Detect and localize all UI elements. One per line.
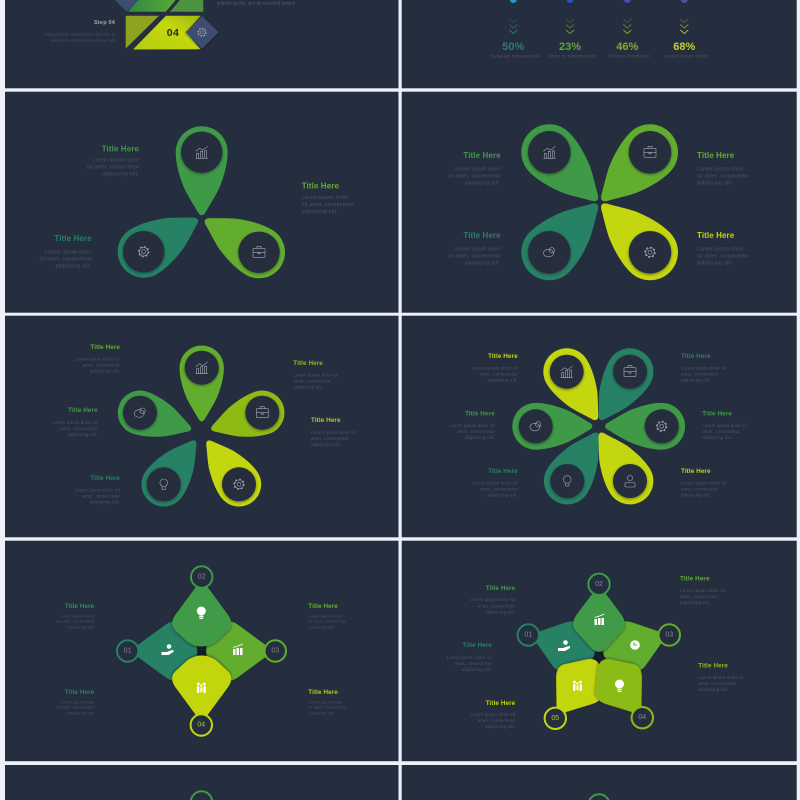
text block: middle right: adipiscing elit.	[702, 435, 733, 440]
segment 04: 04	[197, 722, 205, 728]
panel: six petals	[402, 316, 797, 537]
text block: top left: adipiscing elit.	[103, 172, 139, 178]
percentage column 2: 23%	[559, 41, 581, 53]
text block: top left: Lorem ipsum dolor	[92, 158, 139, 164]
text block: bottom right: adipiscing elit.	[697, 261, 733, 267]
text block: top right: adipiscing elit.	[293, 384, 324, 390]
petal: chart	[180, 346, 224, 421]
text block: top left: Lorem ipsum dolor	[60, 614, 95, 618]
text block: top left: adipiscing elit.	[68, 625, 94, 629]
text block: middle left: Title Here	[68, 407, 98, 414]
text block: top left: adipiscing elit.	[485, 610, 515, 614]
text block: top right: Title Here	[680, 576, 710, 582]
text block: top right	[681, 353, 727, 382]
text block: lower right	[311, 417, 357, 447]
text block: lower right: amet, consectetur	[311, 436, 349, 441]
percentage column 4: 68%	[673, 41, 696, 53]
percentage column 2: Dolor in reprehender	[548, 54, 596, 60]
percentage column 4: Lorem ipsum dolor	[664, 54, 708, 60]
text block: middle left	[447, 642, 493, 672]
text block: bottom right	[308, 689, 347, 715]
text block: top left: Lorem ipsum dolor sit	[75, 356, 121, 362]
panel: five-part star	[402, 541, 797, 761]
text block: right: adipiscing elit.	[302, 209, 338, 215]
text block: bottom left: adipiscing elit.	[464, 261, 501, 267]
text block: middle left: Title Here	[462, 642, 492, 649]
step 03 caption remainder: adipiscing elit, sed do eiusmod tempor	[217, 0, 296, 6]
panel: process steps (cropped top left)	[5, 0, 398, 88]
petal: gear	[582, 185, 690, 292]
text block: middle left: amet, consectetur	[60, 426, 98, 431]
text block: bottom right	[697, 231, 749, 267]
text block: lower right: Title Here	[311, 417, 341, 424]
diamond centre	[197, 646, 207, 656]
text block: top left	[87, 144, 139, 178]
percentage column 1: Eulapias scholasteria	[490, 54, 540, 60]
text block: middle left: amet, consectetur	[457, 429, 495, 434]
text block: bottom left: Lorem ipsum dolor sit	[470, 712, 516, 717]
petal: briefcase	[204, 385, 290, 450]
text block: bottom left: Lorem ipsum dolor	[454, 247, 501, 253]
petal: piggy bank	[512, 403, 592, 450]
petal: gear	[605, 403, 685, 450]
text block: top left: sit amet, consectetur	[448, 174, 501, 180]
text block: right: Lorem ipsum dolor sit	[698, 675, 744, 680]
text block: top right: sit amet, consectetur	[308, 620, 347, 624]
segment 02	[172, 566, 231, 646]
text block: bottom right: Title Here	[681, 468, 711, 475]
petal: briefcase	[582, 113, 690, 220]
text block: bottom right: Lorem ipsum dolor	[697, 247, 744, 253]
panel: cropped bottom right	[402, 765, 797, 800]
segment 02	[573, 574, 625, 652]
step 04 heading and text: Step 04	[94, 20, 116, 26]
petal: chart	[510, 113, 617, 220]
text block: top right: Lorem ipsum dolor	[308, 614, 343, 618]
petal: bulb	[535, 421, 617, 513]
text block: bottom right: adipiscing elit.	[308, 711, 335, 715]
percentage column 4	[664, 0, 708, 60]
text block: bottom right: sit amet, consectetur	[697, 254, 749, 260]
text block: right: adipiscing elit.	[698, 687, 729, 692]
text block: top right: adipiscing elit.	[681, 378, 711, 382]
text block: bottom left: adipiscing elit.	[68, 711, 94, 715]
text block: bottom right: sit amet, consectetur	[308, 706, 347, 710]
text block: bottom left: adipiscing elit.	[485, 724, 515, 729]
text block: bottom left: sit amet, consectetur	[448, 254, 501, 260]
text block: top left: amet, consectetur	[478, 604, 516, 608]
percentage column 1: 50%	[502, 41, 525, 53]
text block: middle left: Title Here	[465, 410, 495, 418]
text block: right: Title Here	[302, 182, 339, 190]
segment 01	[518, 610, 602, 680]
segment 01	[117, 621, 197, 681]
text block: top right: sit amet, consectetur	[697, 174, 749, 180]
text block: bottom left: sit amet, consectetur	[39, 256, 92, 262]
text block: top left: Title Here	[486, 585, 516, 592]
text block: top left: adipiscing elit.	[90, 368, 120, 374]
text block: top right: Title Here	[697, 151, 735, 160]
text block: bottom right: amet, consectetur	[681, 486, 719, 492]
text block: bottom left: adipiscing elit.	[55, 263, 92, 269]
text block: top right: Lorem ipsum dolor sit	[681, 366, 727, 370]
petal: briefcase	[192, 198, 295, 288]
panel: five petals	[5, 316, 398, 537]
segment 03	[206, 621, 286, 681]
text block: top left	[448, 151, 501, 187]
text block: bottom right: Title Here	[308, 689, 338, 696]
text block: middle right: amet, consectetur	[702, 429, 740, 434]
text block: middle left: Lorem ipsum dolor sit	[447, 655, 493, 660]
panel: three petals	[5, 92, 398, 313]
text block: bottom left: Lorem ipsum dolor	[45, 249, 92, 255]
segment 02: 02	[198, 574, 206, 580]
percentage column 1	[490, 0, 540, 60]
petal: briefcase	[580, 339, 662, 432]
text block: bottom left: adipiscing elit.	[90, 500, 120, 504]
segment 04	[581, 646, 662, 730]
text block: bottom left: Title Here	[54, 234, 92, 243]
text block: bottom left: amet, consectetur	[480, 486, 518, 492]
text block: top left: Title Here	[102, 144, 139, 154]
text block: top left	[470, 585, 516, 614]
text block: top right: Lorem ipsum dolor	[697, 167, 744, 173]
text block: bottom left	[470, 700, 516, 729]
text block: bottom right: Title Here	[697, 231, 735, 240]
step 03 band cropped	[115, 0, 203, 12]
text block: lower right: Lorem ipsum dolor sit	[311, 430, 357, 435]
text block: bottom left	[448, 231, 501, 267]
panel: four-part diamond	[5, 541, 398, 761]
text block: bottom left: Lorem ipsum dolor sit	[472, 480, 518, 486]
percentage column 3	[608, 0, 650, 60]
text block: bottom left: Title Here	[90, 475, 120, 482]
text block: bottom right: Lorem ipsum dolor	[308, 700, 343, 704]
segment 04: 04	[638, 714, 646, 721]
text block: top left: adipiscing elit.	[487, 378, 518, 382]
text block: lower right: adipiscing elit.	[311, 442, 341, 447]
text block: bottom right	[681, 468, 727, 498]
percentage column 3: Tempor incididunt	[608, 54, 650, 60]
petal: piggy bank	[510, 185, 617, 292]
text block: top right: amet, consectetur	[681, 372, 719, 376]
text block: bottom left	[39, 234, 92, 269]
text block: top left	[75, 344, 121, 374]
text block: middle right: Lorem ipsum dolor sit	[702, 423, 748, 428]
panel: percentages (cropped top right)	[402, 0, 797, 88]
text block: bottom left: Lorem ipsum dolor	[60, 700, 95, 704]
text block: right: Lorem ipsum dolor	[302, 195, 348, 201]
percentage column 2	[548, 0, 596, 60]
text block: top left: adipiscing elit.	[464, 181, 501, 187]
text block: bottom left: Title Here	[463, 231, 501, 240]
segment 04	[172, 656, 231, 736]
text block: top right: amet, consectetur	[680, 594, 718, 599]
petal: chart	[176, 126, 228, 215]
step 04 heading and text	[45, 20, 116, 42]
text block: bottom left: Lorem ipsum dolor sit	[75, 488, 121, 492]
text block: bottom left: amet, consectetur	[82, 494, 120, 498]
text block: right: sit amet, consectetur	[302, 202, 354, 208]
segment 01: 01	[124, 648, 132, 654]
step 04 shapes: 04	[167, 27, 179, 39]
panel: four petals	[402, 92, 797, 313]
text block: top right: amet, consectetur	[293, 378, 331, 384]
text block: top right: Title Here	[308, 603, 338, 610]
text block: top left: Title Here	[65, 603, 95, 610]
text block: top left: amet, consectetur	[82, 362, 120, 368]
text block: middle left	[52, 407, 98, 437]
text block: top left: sit amet, consectetur	[87, 165, 139, 171]
text block: middle right: Title Here	[702, 410, 732, 418]
segment 03	[596, 610, 680, 680]
segment 05: 05	[551, 715, 559, 722]
text block: top right	[308, 603, 347, 629]
text block: top right: adipiscing elit.	[680, 600, 710, 605]
text block: right	[302, 182, 354, 215]
petal: piggy bank	[112, 385, 198, 450]
text block: bottom left: Title Here	[488, 468, 518, 475]
text block: right: Title Here	[698, 662, 728, 670]
star centre	[593, 652, 605, 664]
text block: top left: Lorem ipsum dolor sit	[472, 366, 518, 370]
text block: bottom left: Title Here	[65, 689, 95, 696]
text block: bottom left: Title Here	[486, 700, 516, 707]
petal: gear	[189, 428, 270, 515]
text block: middle left: Lorem ipsum dolor sit	[449, 423, 495, 428]
text block: top right: Title Here	[293, 360, 323, 367]
petal: chart	[534, 339, 617, 432]
text block: top left: Title Here	[90, 344, 120, 351]
text block: top left: sit amet, consectetur	[56, 620, 95, 624]
text block: top right: adipiscing elit.	[308, 625, 335, 629]
text block: top right: Title Here	[681, 353, 711, 360]
segment 05	[536, 646, 617, 730]
text block: right	[698, 662, 744, 692]
text block: top left: Title Here	[463, 151, 501, 160]
text block: top right	[293, 360, 339, 390]
segment 01: 01	[524, 632, 532, 638]
text block: top left	[472, 353, 518, 382]
text block: bottom left	[75, 475, 121, 504]
text block: middle right	[702, 410, 748, 440]
petal: gear	[108, 197, 211, 287]
text block: bottom right: Lorem ipsum dolor sit	[681, 480, 727, 486]
text block: bottom left: sit amet, consectetur	[56, 706, 95, 710]
text block: bottom left: adipiscing elit.	[487, 492, 518, 498]
text block: middle left: adipiscing elit.	[67, 432, 98, 437]
text block: top right: Lorem ipsum dolor sit	[680, 588, 726, 593]
text block: top left: Lorem ipsum dolor sit	[470, 597, 516, 602]
text block: top right: adipiscing elit.	[697, 181, 733, 187]
segment 02: 02	[595, 581, 603, 588]
step 04 shapes	[126, 16, 218, 49]
text block: right: amet, consectetur	[698, 681, 736, 686]
panel: cropped bottom left	[5, 765, 398, 800]
text block: middle left: adipiscing elit.	[464, 435, 495, 440]
percentage column 3: 46%	[616, 41, 639, 53]
text block: bottom left: amet, consectetur	[478, 718, 516, 723]
step 04 heading and text: Suspendisse ullamcorper dictumst at	[45, 32, 116, 36]
segment 03: 03	[271, 648, 279, 654]
petal: bulb	[133, 428, 213, 515]
text block: bottom left	[56, 689, 95, 715]
petal: person	[580, 421, 662, 513]
text block: top left: Lorem ipsum dolor	[454, 167, 501, 173]
text block: middle left: adipiscing elit.	[462, 667, 492, 672]
segment 03: 03	[665, 632, 673, 638]
text block: top right	[680, 576, 726, 605]
text block: top left: amet, consectetur	[480, 372, 518, 376]
text block: bottom right: adipiscing elit.	[681, 492, 711, 498]
text block: top left	[56, 603, 95, 629]
text block: middle left	[449, 410, 495, 440]
text block: middle left: amet, consectetur	[454, 661, 492, 666]
text block: top right	[697, 151, 749, 187]
text block: top left: Title Here	[488, 353, 518, 360]
text block: top right: Lorem ipsum dolor sit	[293, 372, 339, 378]
step 04 heading and text: aliqua ex decommodo ornare quis	[51, 38, 116, 42]
text block: middle left: Lorem ipsum dolor sit	[52, 420, 98, 425]
text block: bottom left	[472, 468, 518, 498]
